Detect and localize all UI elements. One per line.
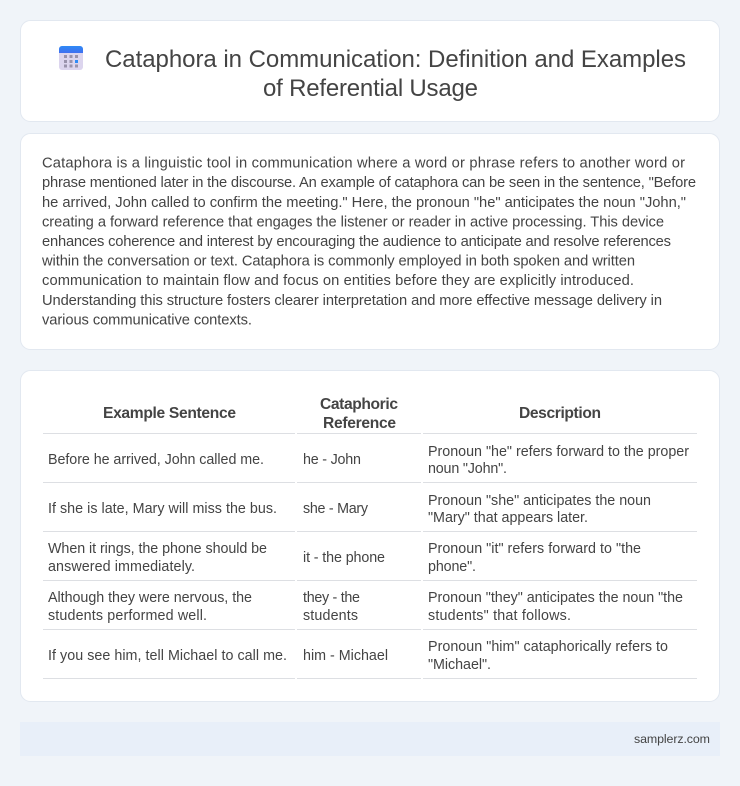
table row 5 bbox=[48, 639, 668, 673]
title bbox=[105, 46, 686, 102]
table row 3: answered immediately. bbox=[48, 559, 195, 575]
table row 4: Although they were nervous, the bbox=[48, 590, 252, 606]
text block: definition: Understanding this structure fosters clearer interpretation and more effective message delivery in bbox=[42, 293, 662, 309]
title: of Referential Usage bbox=[263, 75, 478, 102]
table row 1: noun "John". bbox=[428, 461, 507, 477]
footer text: samplerz.com bbox=[634, 732, 710, 746]
table row 4: students" that follows. bbox=[428, 608, 571, 624]
table header: Example Sentence bbox=[103, 405, 236, 422]
table row 4: students bbox=[303, 608, 358, 624]
table header: Cataphoric bbox=[320, 396, 398, 413]
title: Cataphora in Communication: Definition and Examples bbox=[105, 46, 686, 73]
table row 3: it - the phone bbox=[303, 550, 385, 566]
table row 4 bbox=[48, 590, 683, 624]
table row 1: Pronoun "he" refers forward to the proper bbox=[428, 444, 689, 460]
table row 5: "Michael". bbox=[428, 657, 491, 673]
panel: examples table bbox=[20, 370, 720, 702]
table row 3: When it rings, the phone should be bbox=[48, 541, 267, 557]
table row 4: students performed well. bbox=[48, 608, 207, 624]
table row 5: him - Michael bbox=[303, 648, 388, 664]
table header: Description bbox=[519, 405, 601, 422]
table row 5: Pronoun "him" cataphorically refers to bbox=[428, 639, 668, 655]
table row 2: Pronoun "she" anticipates the noun bbox=[428, 493, 651, 509]
table row 1: he - John bbox=[303, 452, 361, 468]
text block: definition: Cataphora is a linguistic tool in communication where a word or phrase refers to another word or bbox=[42, 156, 685, 172]
text block: definition: phrase mentioned later in the discourse. An example of cataphora can be seen in the sentence, "Before bbox=[42, 175, 696, 191]
table row 1: Before he arrived, John called me. bbox=[48, 452, 264, 468]
panel: intro paragraph bbox=[20, 134, 720, 350]
text block: definition: enhances coherence and interest by encouraging the audience to anticipate and resolve references bbox=[42, 234, 671, 250]
table row 3: phone". bbox=[428, 559, 476, 575]
text block: definition: he arrived, John called to confirm the meeting." Here, the pronoun "he" anticipates the noun "John," bbox=[42, 195, 686, 211]
table header: Reference bbox=[323, 415, 396, 432]
table row 2: "Mary" that appears later. bbox=[428, 510, 588, 526]
table row 3: Pronoun "it" refers forward to "the bbox=[428, 541, 641, 557]
table row 2 bbox=[48, 493, 651, 526]
text block: definition: various communicative contexts. bbox=[42, 312, 252, 328]
table row 3 bbox=[48, 541, 641, 575]
text block: definition bbox=[41, 156, 696, 328]
table row 1 bbox=[48, 444, 689, 477]
table header bbox=[103, 396, 601, 432]
text block: definition: communication to maintain flow and focus on entities before they are explicitly introduced. bbox=[42, 273, 634, 289]
text block: definition: creating a forward reference that engages the listener or reader in active processing. This device bbox=[42, 214, 664, 230]
table row 5: If you see him, tell Michael to call me. bbox=[48, 648, 287, 664]
table row 2: she - Mary bbox=[303, 501, 369, 517]
icon: calendar bbox=[59, 46, 83, 70]
table row 4: they - the bbox=[303, 590, 360, 606]
footer bar bbox=[20, 722, 720, 756]
table row 4: Pronoun "they" anticipates the noun "the bbox=[428, 590, 683, 606]
text block: definition: within the conversation or text. Cataphora is commonly employed in both spoken and written bbox=[41, 254, 635, 270]
table row 2: If she is late, Mary will miss the bus. bbox=[48, 501, 277, 517]
panel: title card bbox=[20, 20, 720, 122]
